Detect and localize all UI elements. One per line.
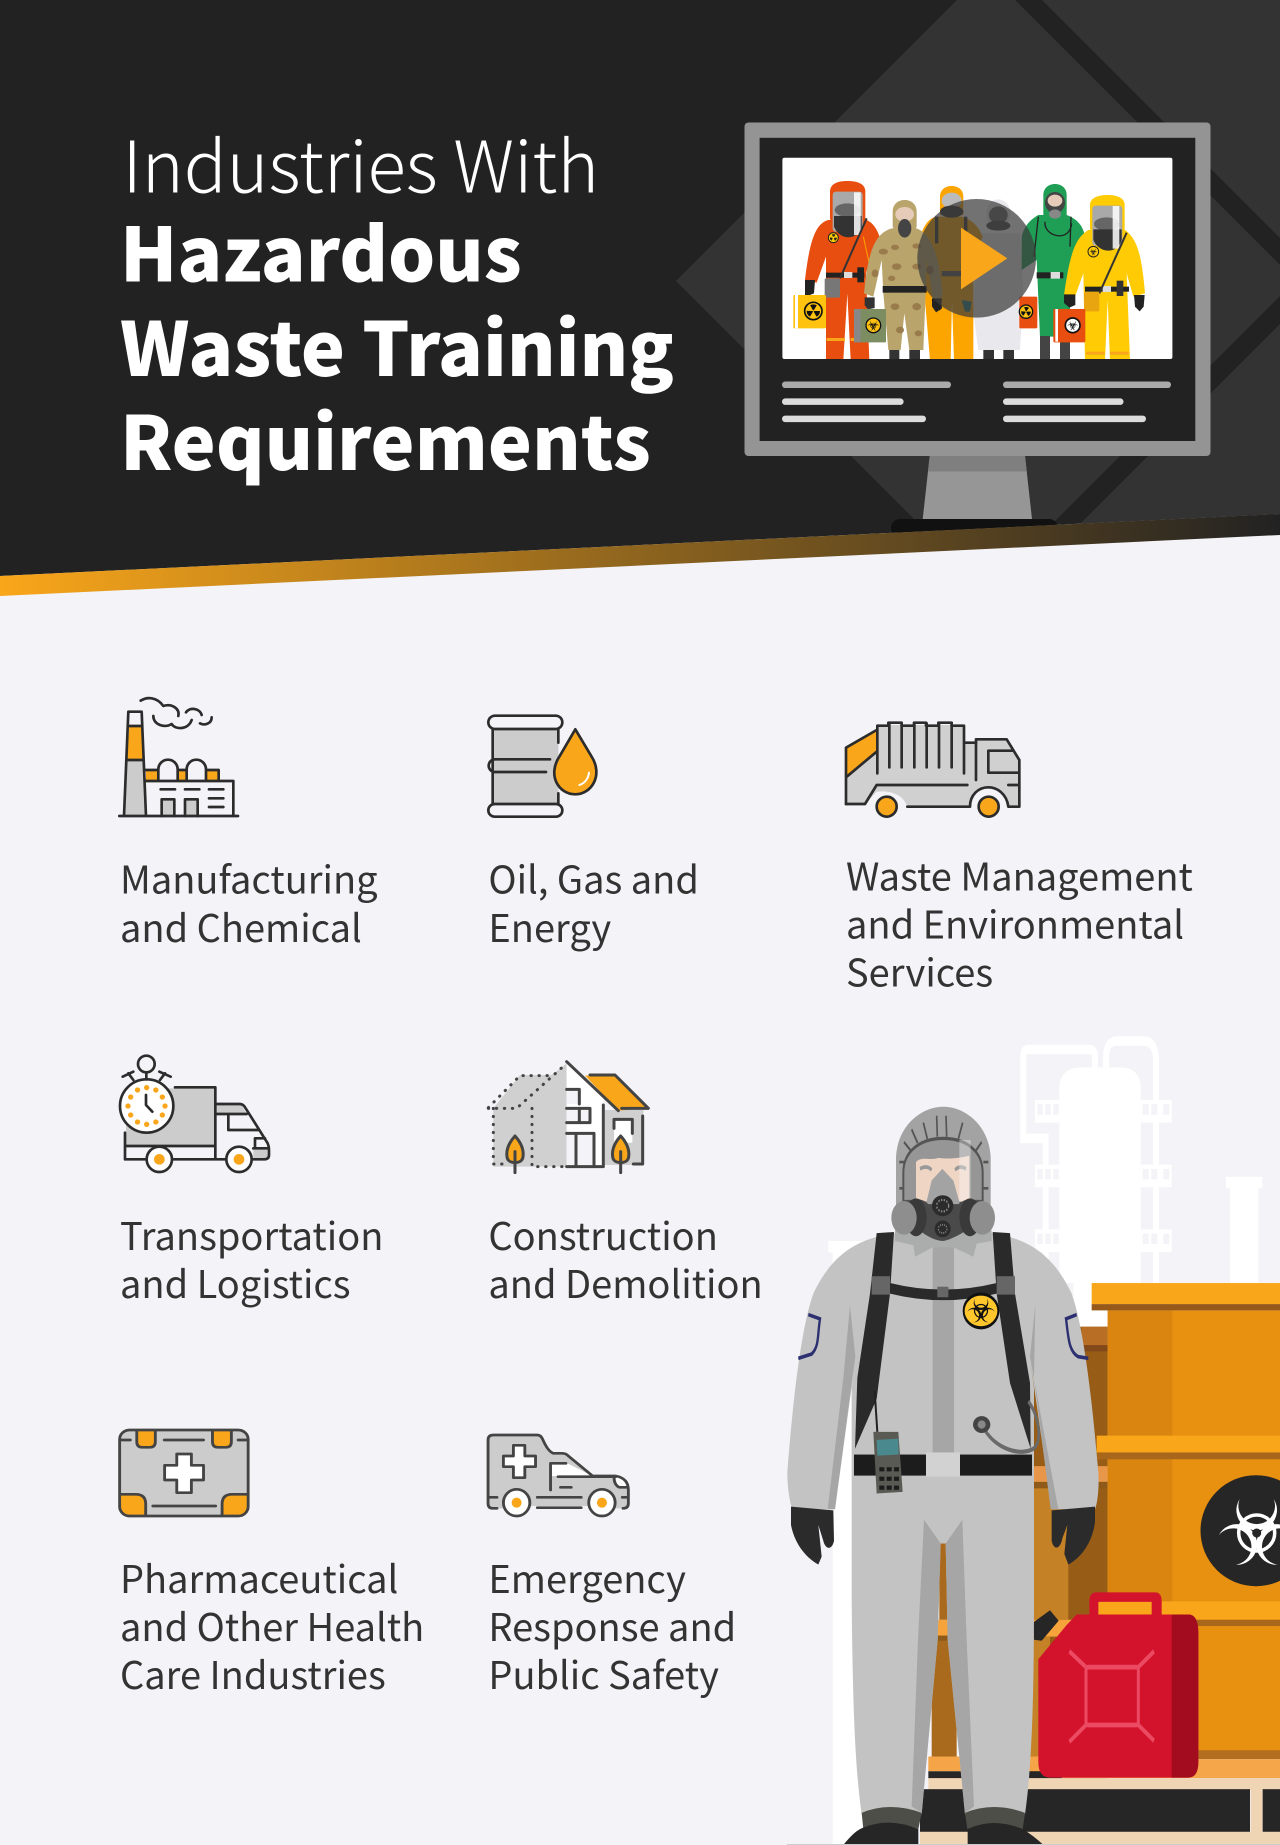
- worker figure: [787, 1107, 1099, 1845]
- label: and Chemical: [120, 898, 362, 953]
- video frame: hazmat team: [793, 181, 1145, 360]
- label: Construction: [488, 1206, 718, 1261]
- icon: house under construction: [488, 1062, 648, 1173]
- head with respirator: [891, 1107, 995, 1241]
- person: amber suit: [920, 186, 983, 360]
- radio: [873, 1391, 903, 1493]
- item: Emergency Response and Public Safety: [488, 1435, 736, 1700]
- label: and Demolition: [488, 1254, 763, 1309]
- label: Oil, Gas and: [488, 850, 699, 904]
- item: Oil, Gas and Energy: [488, 716, 699, 953]
- red fuel can: [1033, 1592, 1198, 1778]
- title: Requirements: [120, 385, 651, 492]
- item: Pharmaceutical and Other Health Care Industries: [120, 1430, 424, 1700]
- label: Energy: [488, 898, 611, 953]
- front barrel: [1047, 1283, 1280, 1778]
- title: Waste Training: [120, 291, 674, 398]
- accent stripe: [0, 514, 1280, 596]
- label: Public Safety: [488, 1645, 719, 1700]
- video description lines: [782, 382, 1171, 422]
- label: Manufacturing: [120, 850, 378, 904]
- header panel: [0, 0, 1280, 600]
- monitor illustration: [744, 122, 1210, 537]
- label: Response and: [488, 1597, 736, 1652]
- person: orange suit: [793, 181, 881, 360]
- icon: delivery truck with stopwatch: [120, 1056, 269, 1172]
- title: [120, 112, 674, 492]
- label: and Logistics: [120, 1254, 351, 1309]
- label: Pharmaceutical: [120, 1549, 398, 1604]
- icon: factory: [119, 698, 238, 816]
- label: and Environmental: [846, 894, 1184, 950]
- label: Care Industries: [120, 1645, 386, 1700]
- person: green suit: [1019, 184, 1085, 360]
- person: yellow suit: [1053, 195, 1145, 360]
- icon: ambulance: [488, 1435, 628, 1516]
- icon: garbage truck: [846, 723, 1019, 817]
- ground edge: [787, 1844, 1280, 1845]
- item: Transportation and Logistics: [120, 1056, 383, 1309]
- label: Services: [846, 942, 993, 998]
- person: white suit: [973, 199, 1023, 360]
- title: Industries With: [122, 112, 599, 214]
- barrel biohazard badge: [1200, 1475, 1280, 1586]
- title: Hazardous: [120, 197, 522, 304]
- label: Transportation: [120, 1206, 383, 1261]
- label: Waste Management: [846, 846, 1193, 902]
- illustration: hazmat worker scene: [787, 1041, 1280, 1845]
- back barrels: [928, 1327, 1108, 1779]
- background refinery silhouette: [828, 1041, 1262, 1845]
- label: and Other Health: [120, 1597, 424, 1652]
- icon: medical case: [120, 1430, 248, 1516]
- icon: play button: [917, 199, 1036, 318]
- item: Construction and Demolition: [488, 1062, 763, 1309]
- pallet: [920, 1771, 1280, 1845]
- label: Emergency: [488, 1549, 686, 1604]
- icon: oil barrel and drop: [488, 716, 596, 817]
- item: Waste Management and Environmental Services: [846, 723, 1193, 998]
- person: camouflage suit: [854, 200, 943, 360]
- item: Manufacturing and Chemical: [119, 698, 378, 953]
